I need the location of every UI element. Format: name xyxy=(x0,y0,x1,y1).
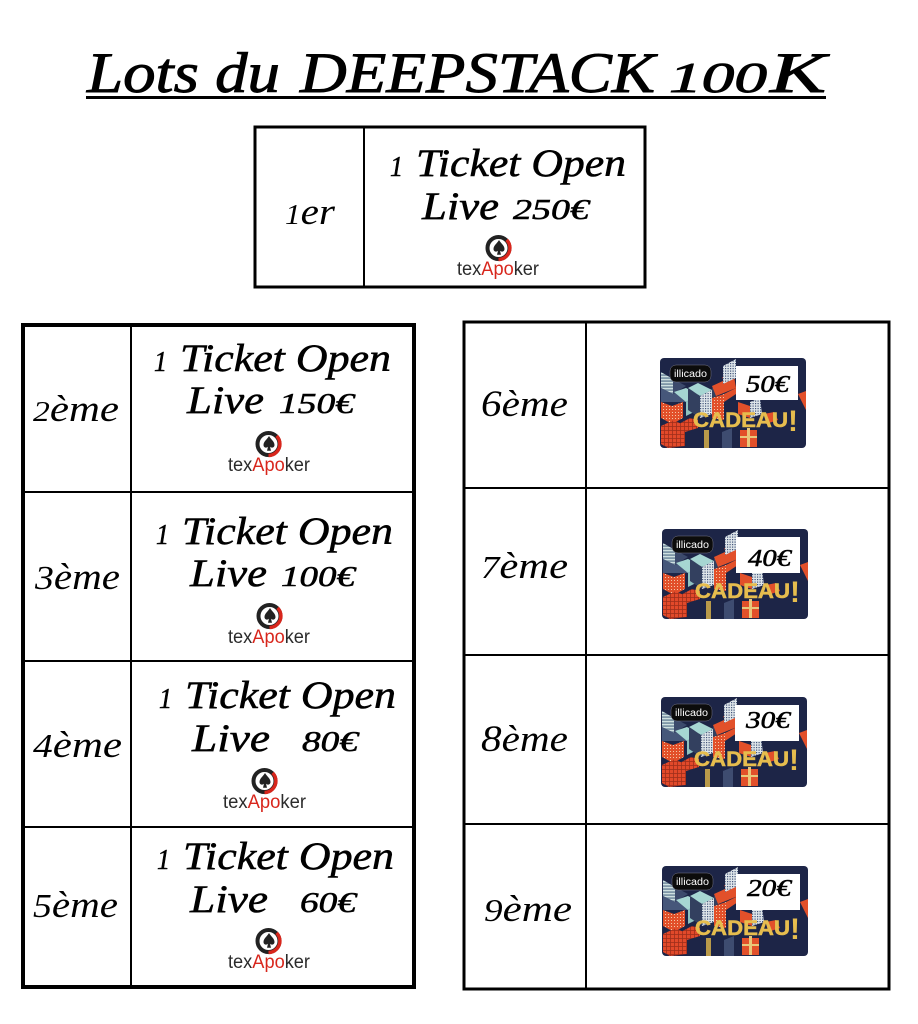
row: 3eme: 1 xyxy=(156,520,169,551)
row: 4eme: 80€ xyxy=(302,726,360,758)
prize: 250 euro ticket: 1 xyxy=(390,152,403,183)
row: 5eme: Ticket Open xyxy=(183,835,394,878)
row: 6eme: 6ème xyxy=(481,384,568,425)
gift card: 40 euro: CADEAU xyxy=(695,580,790,603)
logo: texApoker xyxy=(457,237,540,280)
gift card: 40 euro: ! xyxy=(790,576,800,609)
logo: texApoker xyxy=(228,930,311,973)
gift card: 30 euro: illicado xyxy=(675,708,708,719)
gift card: 50 euro: CADEAU xyxy=(693,409,788,432)
gift card: 30 euro: CADEAU xyxy=(694,748,789,771)
gift card: 30 euro xyxy=(661,697,807,787)
row: 4eme xyxy=(33,674,396,813)
prize: 250 euro ticket: Ticket Open xyxy=(416,142,626,185)
logo: texApoker xyxy=(223,770,307,813)
row: 2eme xyxy=(33,337,391,476)
gift card: 50 euro: ! xyxy=(788,405,798,438)
gift card: 40 euro xyxy=(662,529,808,619)
row: 6eme xyxy=(481,358,806,448)
gift card: 20 euro: 20€ xyxy=(747,876,792,902)
row: 4eme: Ticket Open xyxy=(185,674,396,717)
logo: texApoker: texApoker xyxy=(223,792,307,813)
row: 9eme xyxy=(484,866,808,956)
logo: texApoker: texApoker xyxy=(228,455,311,476)
row: 3eme: 100€ xyxy=(281,561,357,593)
logo: texApoker: texApoker xyxy=(457,259,540,280)
gift card: 40 euro: 40€ xyxy=(748,546,792,572)
title: K xyxy=(769,42,830,105)
row: 2eme: 1 xyxy=(154,347,167,378)
logo: texApoker: texApoker xyxy=(228,952,311,973)
gift card: 40 euro: illicado xyxy=(676,540,709,551)
gift card: 50 euro xyxy=(660,358,806,448)
title xyxy=(86,42,830,105)
row: 4eme: Live xyxy=(191,717,270,760)
logo: texApoker xyxy=(228,433,311,476)
row: 4eme: 4ème xyxy=(33,725,122,766)
panel: prizes 6 to 9 xyxy=(464,322,889,989)
row: 5eme: 1 xyxy=(157,845,170,876)
gift card: 50 euro: illicado xyxy=(674,369,707,380)
row: 5eme: 60€ xyxy=(300,887,358,919)
row: 3eme: 3ème xyxy=(34,557,120,598)
gift card: 20 euro: ! xyxy=(790,913,800,946)
prize: 250 euro ticket: 250€ xyxy=(513,194,591,226)
row: 4eme: 1 xyxy=(159,684,172,715)
gift card: 20 euro: illicado xyxy=(676,877,709,888)
row: 2eme: Ticket Open xyxy=(180,337,391,380)
gift card: 50 euro: 50€ xyxy=(746,372,790,398)
row: 5eme: 5ème xyxy=(33,885,118,926)
logo: texApoker xyxy=(228,605,311,648)
row: 2eme: 150€ xyxy=(279,388,356,420)
row: 2eme: Live xyxy=(186,379,264,422)
row: 8eme xyxy=(481,697,807,787)
prize: 250 euro ticket xyxy=(390,142,626,228)
panel: 1st prize xyxy=(255,127,645,287)
gift card: 20 euro: CADEAU xyxy=(695,917,790,940)
row: 2eme: 2ème xyxy=(33,389,119,430)
row: 8eme: 8ème xyxy=(481,719,568,760)
row: 3eme: Live xyxy=(189,552,267,595)
row: 5eme: Live xyxy=(189,878,268,921)
title: 100 xyxy=(669,56,767,102)
row: 9eme: 9ème xyxy=(484,889,572,930)
gift card: 30 euro: ! xyxy=(789,744,799,777)
panel: prizes 2 to 5 xyxy=(23,325,414,987)
row: 3eme xyxy=(34,510,393,648)
row: 7eme: 7ème xyxy=(481,546,568,587)
row: 5eme xyxy=(33,835,394,973)
gift card: 30 euro: 30€ xyxy=(745,708,791,734)
row: 7eme xyxy=(481,529,808,619)
title: Lots du xyxy=(86,42,280,105)
rank: 1er: 1er xyxy=(285,192,336,233)
row: 3eme: Ticket Open xyxy=(182,510,393,553)
prize: 250 euro ticket: Live xyxy=(421,185,499,228)
logo: texApoker: texApoker xyxy=(228,627,311,648)
title: DEEPSTACK xyxy=(299,42,658,105)
gift card: 20 euro xyxy=(662,866,808,956)
